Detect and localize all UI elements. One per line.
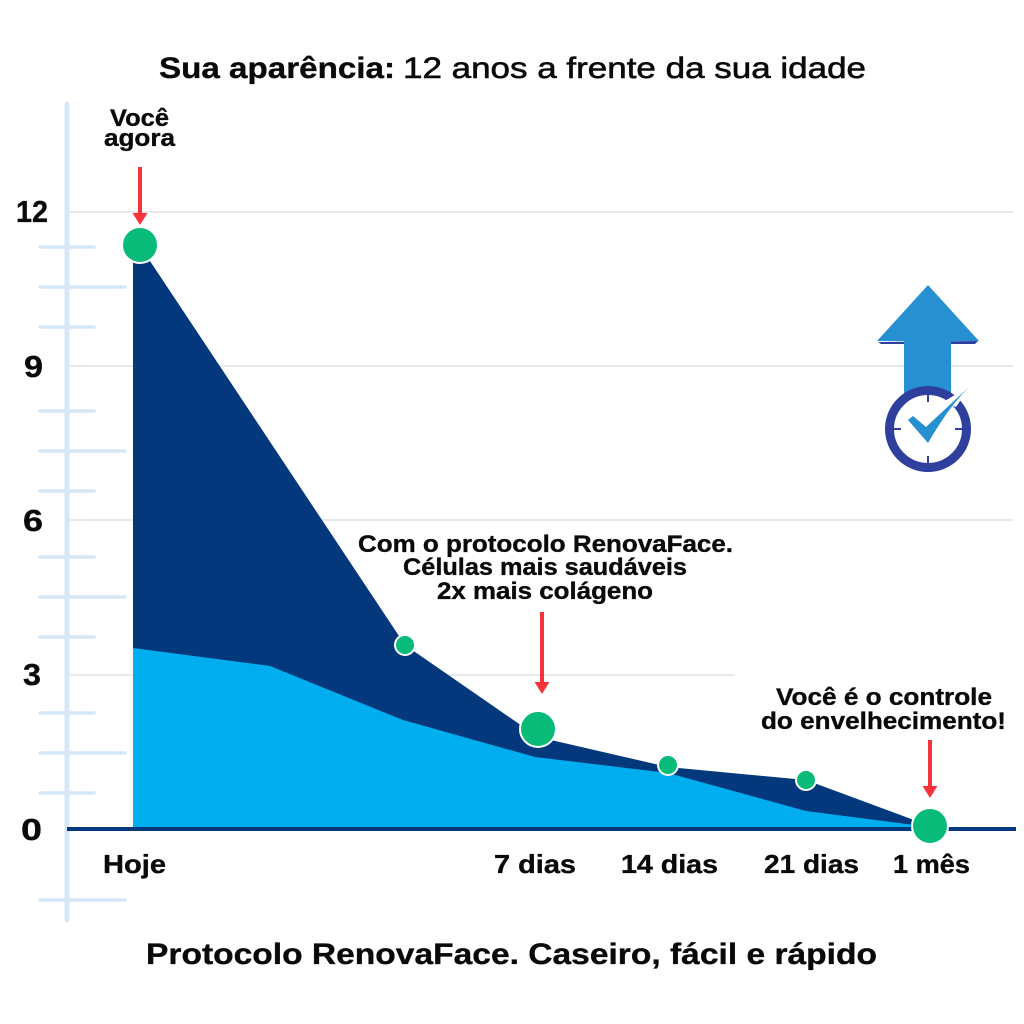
x axis labels	[103, 849, 970, 879]
y axis labels: 12	[16, 194, 48, 229]
callout: controle	[761, 684, 1006, 735]
y axis labels: 6	[23, 503, 43, 538]
y axis ruler	[40, 104, 125, 920]
x axis labels: 21 dias	[764, 849, 859, 879]
y axis labels: 3	[23, 657, 41, 692]
callout: protocolo: 2x mais colágeno	[437, 578, 653, 605]
y axis labels: 9	[24, 349, 43, 384]
baseline	[67, 827, 1016, 831]
callout: controle: Você é o controle	[776, 684, 992, 711]
y axis labels	[16, 194, 48, 847]
callout: controle: do envelhecimento!	[761, 708, 1006, 735]
arrow: protocolo	[534, 612, 550, 694]
arrow: controle	[922, 740, 938, 798]
title: Sua aparência:	[159, 52, 395, 85]
footer heading: Protocolo RenovaFace. Caseiro, fácil e rápido	[146, 938, 877, 971]
callout: você agora	[104, 105, 176, 152]
x axis labels: Hoje	[103, 849, 166, 879]
callout: protocolo	[358, 531, 733, 605]
callout: protocolo: Células mais saudáveis	[403, 554, 687, 581]
x axis labels: 1 mês	[893, 849, 970, 879]
light blue area	[133, 648, 930, 829]
title	[159, 52, 866, 85]
y axis labels: 0	[21, 812, 42, 847]
dark blue area	[133, 245, 930, 829]
icon: up arrow and clock	[877, 285, 979, 468]
title: 12 anos a frente da sua idade	[403, 52, 866, 85]
callout: você agora: agora	[104, 125, 176, 152]
x axis labels: 14 dias	[621, 849, 718, 879]
callout: protocolo: Com o protocolo RenovaFace.	[358, 531, 733, 558]
x axis labels: 7 dias	[494, 849, 576, 879]
callout: você agora: Você	[110, 105, 169, 132]
arrow: você agora	[132, 167, 148, 225]
data points	[122, 227, 948, 844]
